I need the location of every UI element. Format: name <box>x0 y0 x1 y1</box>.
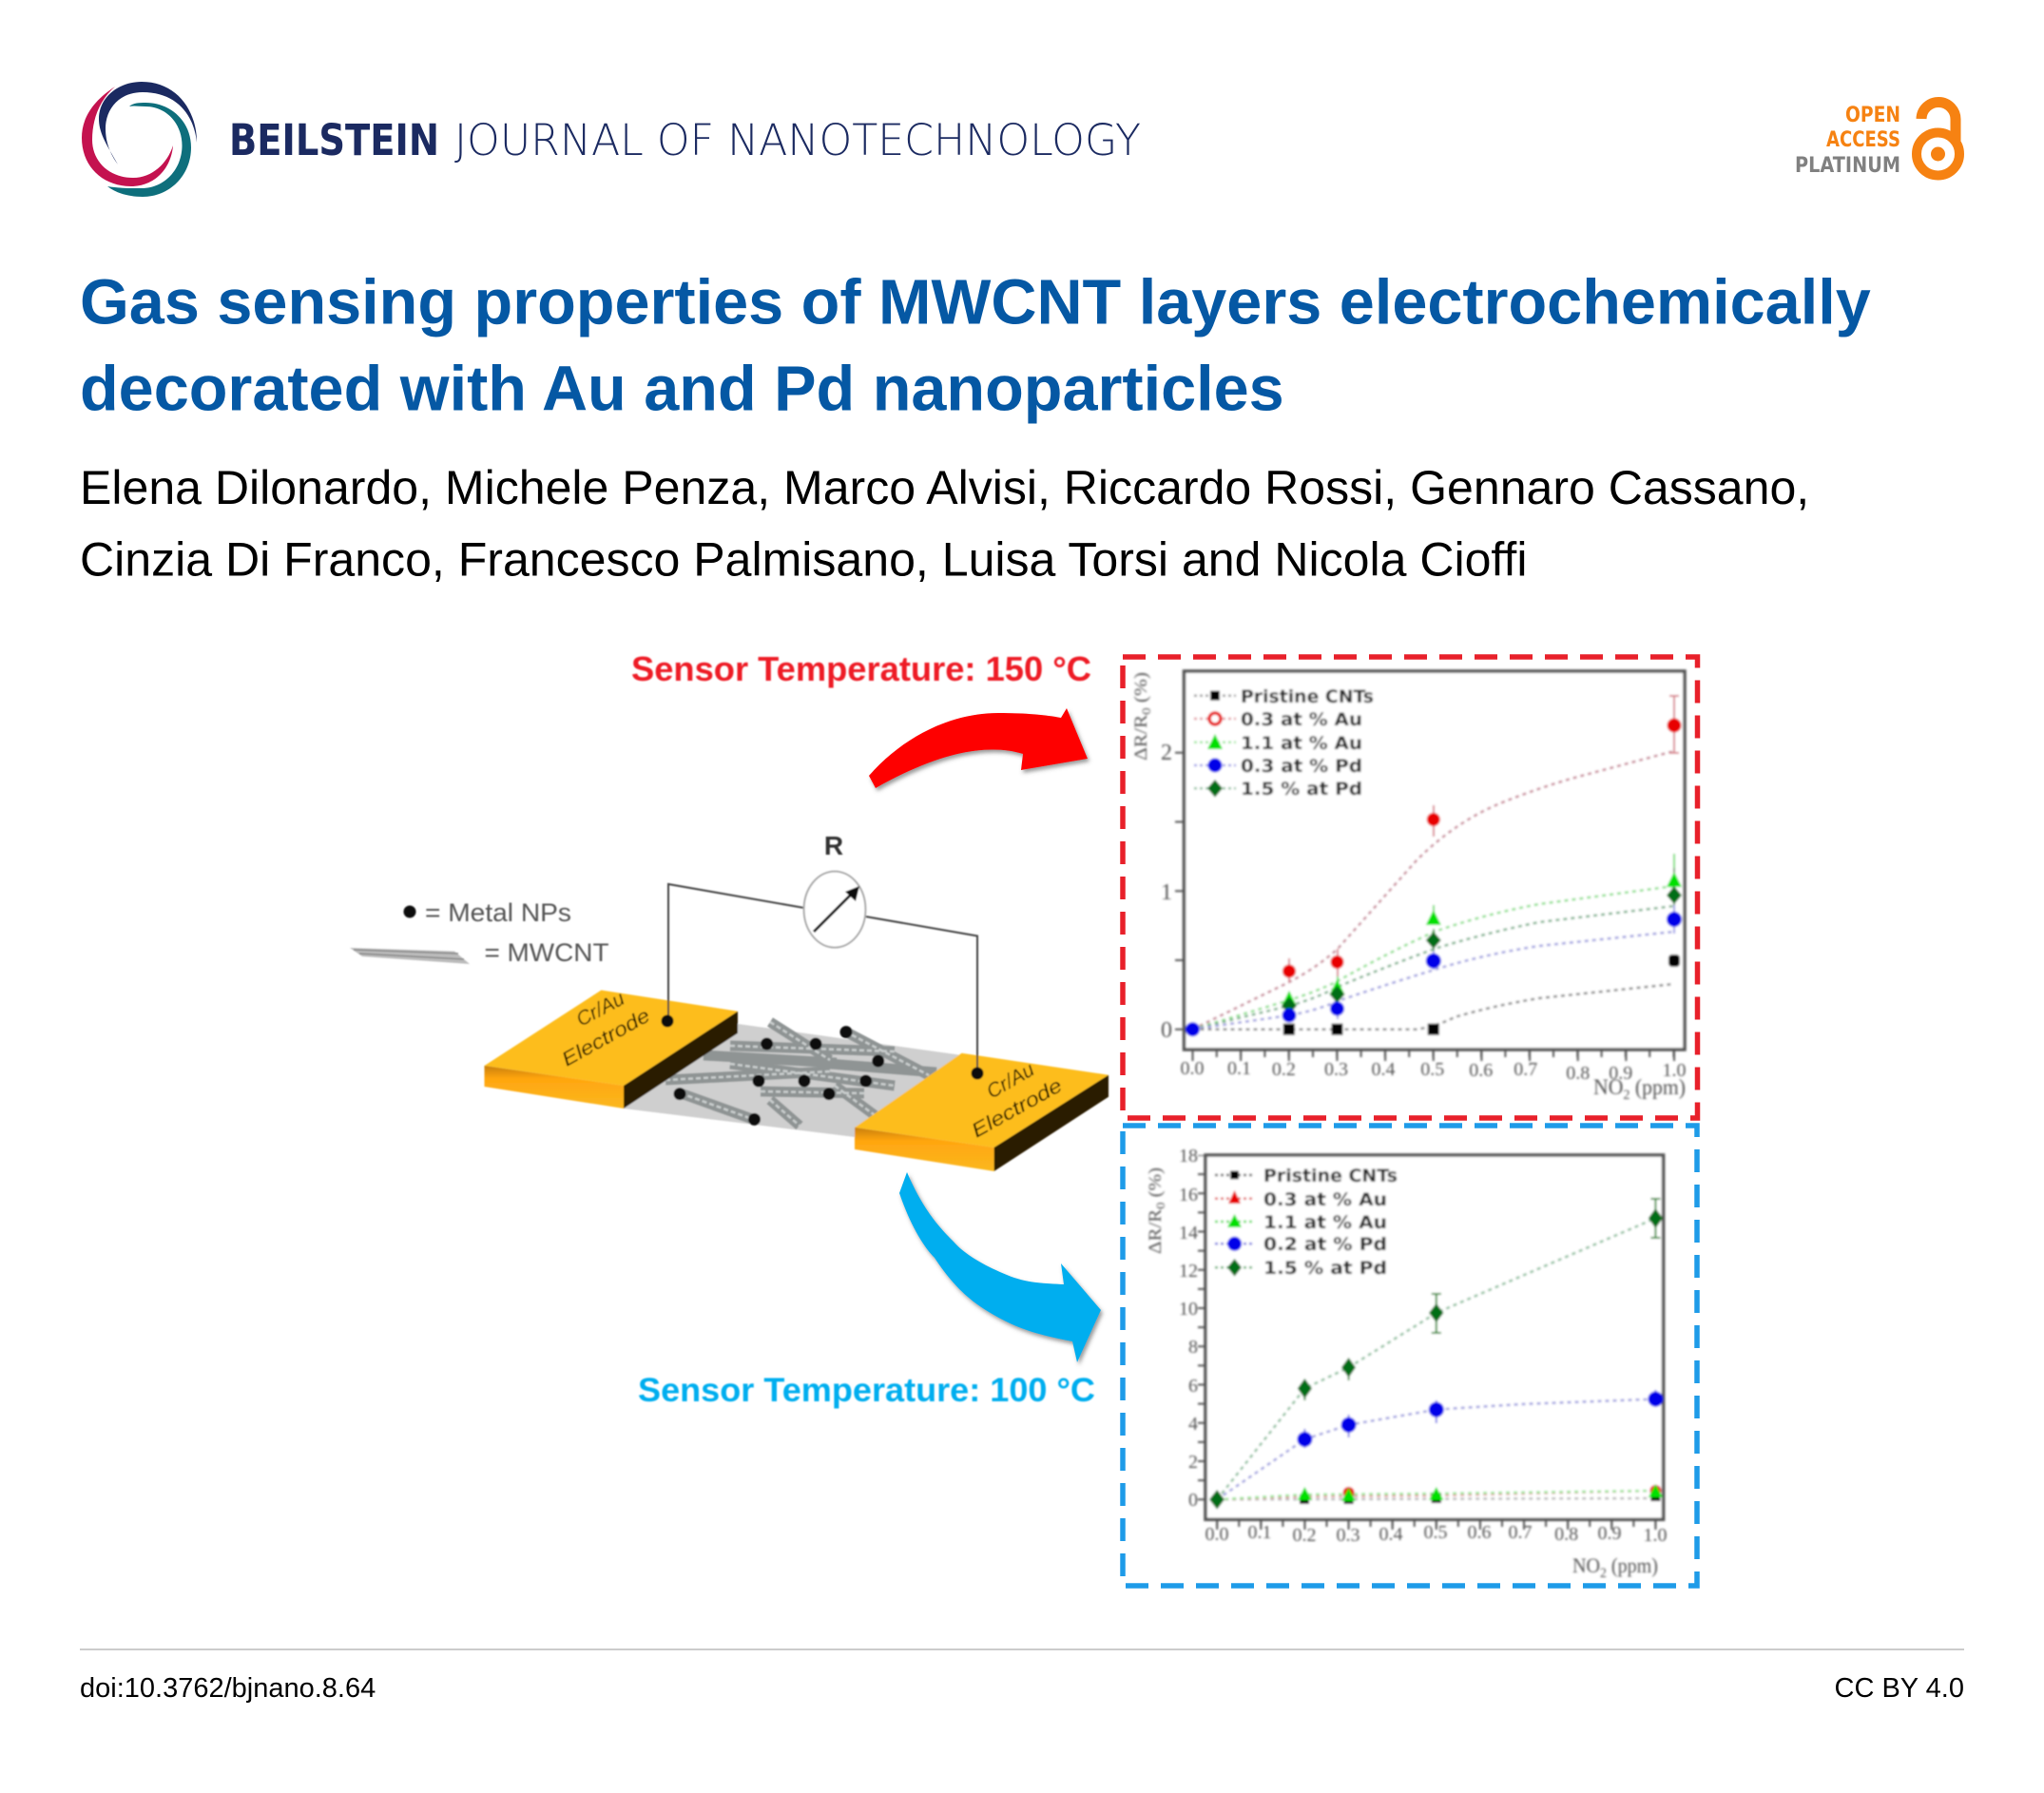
x axis tick labels: 0.7 <box>1508 1522 1533 1543</box>
data markers: 0.2 at % Pd <box>1297 1392 1663 1447</box>
authors <box>80 461 1809 586</box>
chart legend: 1.1 at % Au <box>1263 1212 1387 1233</box>
fitted curves <box>1217 1218 1655 1499</box>
chart legend: Pristine CNTs <box>1263 1166 1398 1186</box>
x axis title: NO <box>1572 1553 1603 1577</box>
data markers: 0.3 at % Au <box>1282 719 1681 978</box>
error bars <box>1304 1199 1660 1448</box>
y axis tick labels: 8 <box>1188 1337 1198 1358</box>
x axis tick labels: 0.9 <box>1609 1063 1632 1084</box>
resistance label: R <box>824 831 843 860</box>
footer divider <box>80 1648 1964 1650</box>
substrate with nanotubes <box>624 1022 962 1137</box>
left electrode: Electrode <box>558 1005 654 1070</box>
chart legend: 0.3 at % Au <box>1263 1189 1387 1210</box>
arrow: blue to lower chart <box>899 1172 1101 1362</box>
x axis tick labels: 1.0 <box>1662 1060 1687 1081</box>
x axis tick labels: 0.2 <box>1272 1059 1296 1080</box>
footer: license: CC BY 4.0 <box>1835 1673 1964 1704</box>
chart legend: 1.5 % at Pd <box>1241 779 1362 800</box>
x axis tick labels: 0.2 <box>1293 1525 1316 1546</box>
error bars <box>1289 696 1679 1019</box>
chart legend: 0.2 at % Pd <box>1263 1234 1387 1255</box>
y axis tick labels: 4 <box>1188 1414 1198 1435</box>
y axis tick labels: 2 <box>1161 741 1172 765</box>
data markers: 1.1 at % Au <box>1282 872 1682 1006</box>
x axis tick labels: 0.4 <box>1371 1059 1396 1080</box>
x axis tick labels: 0.5 <box>1424 1522 1447 1543</box>
chart legend <box>1194 686 1374 800</box>
data markers: 0.3 at % Pd <box>1186 912 1682 1036</box>
legend: MWCNT: = MWCNT <box>485 938 608 967</box>
open access platinum badge <box>1795 102 1959 178</box>
chart: response at 150 C <box>1131 671 1687 1103</box>
chart legend: 0.3 at % Pd <box>1241 756 1362 777</box>
x axis tick labels: 0.5 <box>1420 1059 1444 1080</box>
x axis tick labels: 0.3 <box>1324 1059 1348 1080</box>
plot frame <box>1205 1155 1664 1519</box>
chart legend: Pristine CNTs <box>1241 686 1374 707</box>
y axis title: ΔR/R <box>1131 720 1151 761</box>
sensor device diagram <box>350 831 1109 1171</box>
footer: doi: doi:10.3762/bjnano.8.64 <box>80 1673 376 1704</box>
journal name: BEILSTEIN <box>229 115 439 165</box>
journal logo swirl <box>82 82 197 197</box>
open access platinum badge: OPEN <box>1845 104 1900 127</box>
x axis tick labels: 0.6 <box>1469 1060 1493 1081</box>
x axis tick labels: 0.6 <box>1468 1522 1491 1543</box>
x axis tick labels: 0.7 <box>1514 1059 1537 1080</box>
data markers: near-zero series <box>1298 1484 1663 1504</box>
panel: 100 C chart dashed frame <box>1123 1126 1697 1586</box>
chart legend: 0.3 at % Au <box>1241 709 1362 730</box>
y axis tick labels: 12 <box>1179 1261 1198 1282</box>
resistance meter <box>804 872 865 948</box>
x axis tick labels: 1.0 <box>1643 1525 1668 1546</box>
x axis tick labels <box>1205 1522 1668 1546</box>
x axis tick labels: 0.8 <box>1566 1063 1590 1084</box>
y axis tick labels: 1 <box>1161 880 1172 905</box>
wires and contacts <box>662 884 983 1080</box>
authors: Cinzia Di Franco, Francesco Palmisano, Luisa Torsi and Nicola Cioffi <box>80 532 1527 586</box>
y axis tick labels: 14 <box>1179 1223 1198 1244</box>
label: sensor temperature 100: Sensor Temperature: 100 °C <box>638 1372 1095 1409</box>
y axis tick labels <box>1161 741 1172 1043</box>
x axis tick labels: 0.0 <box>1205 1524 1228 1545</box>
left electrode: Cr/Au <box>573 988 628 1031</box>
x axis tick labels: 0.3 <box>1337 1525 1359 1546</box>
chart legend <box>1215 1166 1398 1279</box>
y axis title: ΔR/R <box>1146 1213 1166 1254</box>
axis ticks <box>1202 1155 1664 1525</box>
axis ticks <box>1179 684 1685 1055</box>
x axis tick labels <box>1181 1058 1687 1084</box>
journal name: JOURNAL OF NANOTECHNOLOGY <box>454 115 1141 165</box>
x axis tick labels: 0.9 <box>1597 1523 1622 1544</box>
y axis title: 0 <box>1153 1203 1167 1209</box>
y axis tick labels: 10 <box>1179 1299 1198 1320</box>
x axis title: 2 <box>1623 1088 1629 1103</box>
legend: MWCNT <box>350 938 608 967</box>
fitted curves <box>1192 751 1674 1030</box>
plot frame <box>1185 671 1685 1050</box>
title: Gas sensing properties of MWCNT layers electrochemically <box>80 268 1871 338</box>
right electrode: Electrode <box>968 1074 1066 1142</box>
data markers: 1.5 at % Pd <box>1282 886 1682 1014</box>
y axis title: 0 <box>1139 707 1153 715</box>
right electrode: Cr/Au <box>983 1058 1038 1103</box>
legend: metal nanoparticles: = Metal NPs <box>425 898 571 927</box>
label: sensor temperature 150: Sensor Temperature: 150 °C <box>631 649 1091 688</box>
chart: response at 100 C <box>1146 1146 1668 1581</box>
x axis tick labels: 0.8 <box>1554 1524 1578 1545</box>
y axis tick labels: 2 <box>1188 1452 1198 1473</box>
y axis tick labels: 18 <box>1179 1146 1198 1166</box>
x axis title: NO <box>1593 1075 1625 1099</box>
y axis title: (%) <box>1146 1167 1166 1203</box>
chart legend: 1.1 at % Au <box>1241 733 1362 754</box>
y axis tick labels: 0 <box>1188 1490 1198 1511</box>
x axis title: (ppm) <box>1629 1075 1686 1099</box>
x axis tick labels: 0.4 <box>1379 1524 1403 1545</box>
y axis title: (%) <box>1131 672 1151 707</box>
y axis tick labels <box>1179 1146 1198 1511</box>
open access platinum badge: ACCESS <box>1826 128 1900 152</box>
y axis tick labels: 6 <box>1188 1376 1198 1397</box>
right electrode <box>855 1053 1109 1171</box>
authors: Elena Dilonardo, Michele Penza, Marco Alvisi, Riccardo Rossi, Gennaro Cassano, <box>80 461 1809 514</box>
data markers: 1.5 at % Pd <box>1209 1208 1663 1510</box>
arrow: red to upper chart <box>869 708 1088 788</box>
open access platinum badge: PLATINUM <box>1795 154 1900 178</box>
title <box>80 268 1871 424</box>
left electrode <box>485 988 738 1109</box>
x axis tick labels: 0.1 <box>1247 1522 1272 1543</box>
data markers: pristine CNTs <box>1283 954 1680 1035</box>
chart legend: 1.5 % at Pd <box>1263 1258 1387 1279</box>
x axis tick labels: 0.0 <box>1181 1058 1204 1079</box>
x axis title: 2 <box>1600 1566 1607 1581</box>
y axis tick labels: 0 <box>1161 1018 1172 1043</box>
panel: 150 C chart dashed frame <box>1123 657 1698 1118</box>
x axis title: (ppm) <box>1607 1553 1658 1577</box>
title: decorated with Au and Pd nanoparticles <box>80 354 1284 424</box>
y axis tick labels: 16 <box>1179 1185 1198 1205</box>
x axis tick labels: 0.1 <box>1227 1058 1251 1079</box>
